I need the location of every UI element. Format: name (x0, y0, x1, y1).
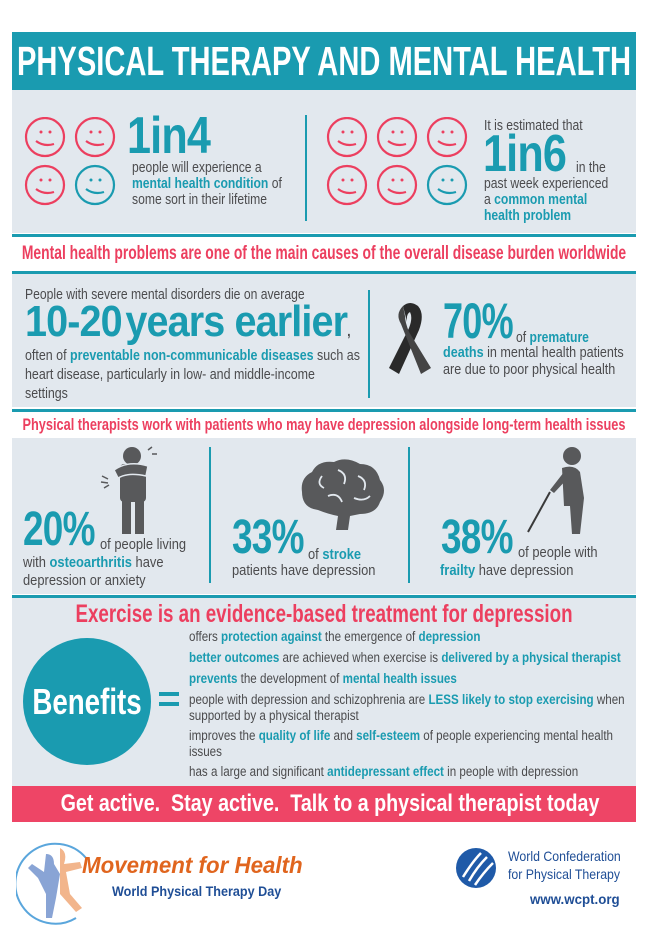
icon: person in pain (100, 446, 157, 534)
list: benefits: better outcomes are achieved when exercise is delivered by a physical therapist (189, 650, 621, 665)
text: stroke: of stroke (308, 546, 361, 563)
text: premature deaths: of premature (516, 329, 589, 346)
circle: benefits (23, 638, 151, 765)
stat: 70%: 70% (443, 293, 513, 349)
text: a common mental (484, 191, 587, 208)
text: health problem (484, 207, 571, 224)
text: are due to poor physical health (443, 361, 615, 378)
title: PHYSICAL THERAPY AND MENTAL HEALTH (17, 38, 631, 84)
stat: 20%: 20% (23, 503, 95, 556)
list: benefits: supported by a physical therapist (189, 708, 359, 722)
stat: 1 in 4: 1in4 (127, 107, 210, 165)
text: preventable diseases: heart disease, particularly in low- and middle-income (25, 366, 315, 383)
text: deaths in mental health patients (443, 344, 624, 361)
list: benefits: prevents the development of mental health issues (189, 671, 457, 686)
text: frailty: of people with (518, 544, 598, 561)
text: 1 in 4 description: some sort in their lifetime (132, 191, 267, 208)
icon: equals (159, 692, 179, 706)
text: frailty have depression (440, 562, 573, 579)
text: 1 in 6 description: in the (576, 159, 606, 176)
text: preventable diseases: often of preventable non-communicable diseases such as (25, 347, 360, 364)
list: benefits: offers protection against the emergence of depression (189, 629, 480, 644)
text: patients have depression (232, 562, 375, 579)
list: benefits: people with depression and schizophrenia are LESS likely to stop exercising when (189, 692, 625, 707)
icon: smileys 1 in 4 (24, 117, 116, 206)
text: preventable diseases (25, 347, 360, 402)
stat: 33%: 33% (232, 511, 304, 564)
circle: benefits: Benefits (32, 681, 142, 722)
text: osteoarthritis: of people living (100, 536, 186, 553)
panel: benefits (12, 598, 636, 786)
text: movement for health: Movement for Health (82, 852, 303, 878)
text: past week experienced (484, 175, 608, 192)
list: benefits: issues (189, 744, 222, 758)
icon: brain (302, 459, 384, 530)
logo: WCPT (456, 848, 621, 907)
list: benefits: has a large and significant antidepressant effect in people with depression (189, 764, 578, 779)
text: 1 in 4 description: people will experience a (132, 159, 262, 176)
logo: movement for health: World Physical Therapy Day (112, 883, 281, 899)
panel: mortality (12, 274, 636, 407)
text: die on average: People with severe mental disorders die on average (25, 286, 305, 303)
stat: years earlier: 10-20years earlier, (25, 297, 350, 346)
stat: 38%: 38% (441, 511, 513, 564)
text: 1 in 4 description: mental health condition of (132, 175, 282, 192)
panel: conditions (12, 438, 636, 594)
banner: call to action (12, 786, 636, 822)
logo: WCPT: www.wcpt.org (530, 891, 620, 907)
panel: prevalence stats (12, 90, 636, 233)
banner: call to action: Get active. Stay active. Talk to a physical therapist today (61, 790, 599, 817)
text: estimated: It is estimated that (484, 117, 583, 134)
heading: exercise: Exercise is an evidence-based treatment for depression (75, 600, 573, 628)
list: benefits (189, 629, 625, 779)
heading: disease burden: Mental health problems are one of the main causes of the overall disease burden worldwide (22, 243, 626, 264)
text: preventable diseases: settings (25, 385, 68, 402)
text: 1 in 4 description (132, 159, 282, 208)
logo: WCPT: for Physical Therapy (508, 866, 620, 882)
icon: black ribbon (389, 303, 431, 374)
stat: 1 in 6: 1in6 (483, 125, 566, 183)
icon: smileys 1 in 6 (326, 117, 468, 206)
text: with osteoarthritis have (23, 554, 164, 571)
logo: WCPT: World Confederation (508, 848, 621, 864)
list: benefits: improves the quality of life and self-esteem of people experiencing mental health (189, 728, 613, 743)
text: depression or anxiety (23, 572, 146, 589)
icon: frail person with cane (527, 447, 584, 534)
logo: movement for health (16, 842, 303, 925)
heading: long-term health: Physical therapists work with patients who may have depression alongside long-term health issues (23, 415, 625, 434)
